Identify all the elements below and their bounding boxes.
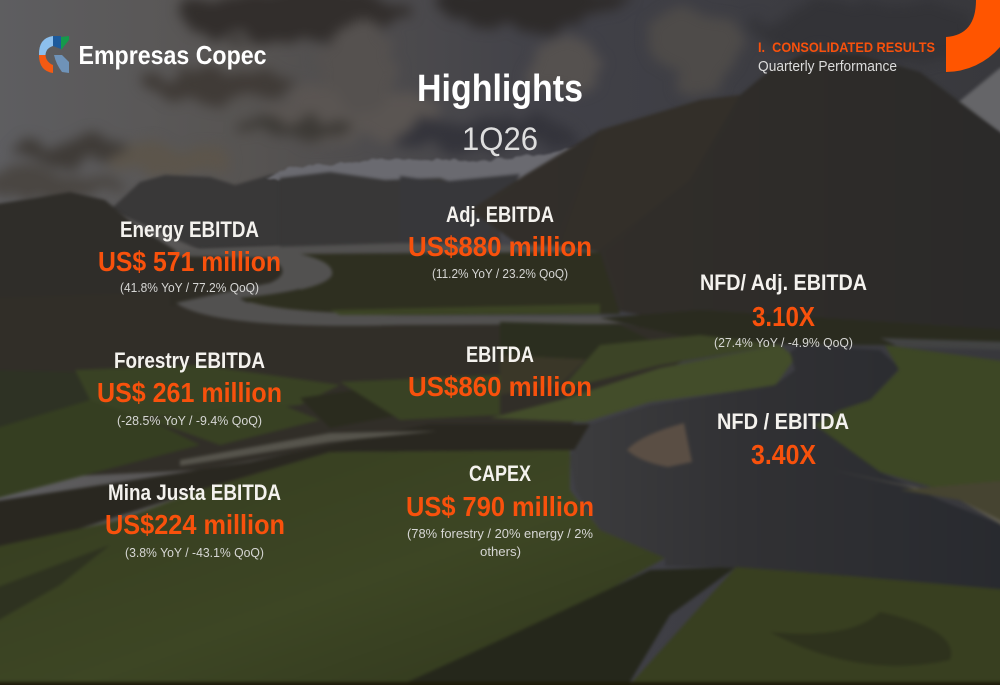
metric: NFD/ Adj. EBITDA: NFD/ Adj. EBITDA: [700, 270, 867, 295]
metric: Adj. EBITDA: US$880 million: [408, 231, 592, 262]
logo: Empresas Copec: Empresas Copec: [78, 40, 266, 70]
metric: Mina Justa EBITDA: US$224 million: [105, 509, 285, 540]
metric: NFD / EBITDA: [717, 409, 849, 470]
sand island: [627, 423, 692, 467]
river: [570, 345, 1000, 590]
valley forest: [0, 292, 720, 480]
metric: CAPEX: (78% forestry / 20% energy / 2%: [407, 526, 593, 541]
metric: NFD/ Adj. EBITDA: 3.10X: [752, 301, 815, 332]
left hill: [0, 192, 232, 305]
island: [242, 252, 620, 315]
big right mountain: [470, 52, 1000, 350]
section label: Quarterly Performance: [758, 58, 897, 75]
metric: CAPEX: CAPEX: [469, 461, 531, 486]
section label: [758, 39, 935, 75]
centre field: [490, 345, 795, 422]
far lake: [175, 243, 700, 326]
metric: NFD/ Adj. EBITDA: (27.4% YoY / -4.9% QoQ): [714, 335, 853, 350]
metric: Forestry EBITDA: (-28.5% YoY / -9.4% QoQ): [117, 413, 262, 428]
icon: logo mark: [39, 36, 69, 73]
metric: CAPEX: US$ 790 million: [406, 491, 594, 522]
metric: CAPEX: others): [480, 544, 521, 559]
metric: CAPEX: [406, 461, 594, 559]
metric: Adj. EBITDA: Adj. EBITDA: [446, 202, 554, 227]
metric: EBITDA: [408, 342, 592, 402]
sand spit: [832, 470, 1000, 530]
metric: NFD/ Adj. EBITDA: [700, 270, 867, 350]
metric: EBITDA: EBITDA: [466, 342, 534, 367]
metric: Forestry EBITDA: Forestry EBITDA: [114, 348, 265, 373]
dark band: [390, 567, 736, 685]
metric: NFD / EBITDA: 3.40X: [751, 439, 816, 470]
section label: I. CONSOLIDATED RESULTS: [758, 39, 935, 55]
main field: [0, 450, 665, 685]
metric: NFD / EBITDA: NFD / EBITDA: [717, 409, 849, 434]
dark tree band: [0, 424, 590, 548]
back range: [110, 172, 420, 250]
bottom right field: [625, 567, 1000, 685]
title: Highlights: [417, 68, 583, 110]
metric: Energy EBITDA: [98, 217, 281, 295]
metric: Energy EBITDA: (41.8% YoY / 77.2% QoQ): [120, 280, 259, 295]
title: [417, 68, 583, 157]
metric: Forestry EBITDA: US$ 261 million: [97, 377, 282, 408]
metric: Mina Justa EBITDA: (3.8% YoY / -43.1% QoQ): [125, 545, 264, 560]
right field: [815, 345, 1000, 495]
far snow peak right: [955, 68, 1000, 140]
metric: Adj. EBITDA: (11.2% YoY / 23.2% QoQ): [432, 266, 568, 281]
far band right: [600, 310, 1000, 345]
metric: Forestry EBITDA: [97, 348, 282, 428]
side channel: [180, 431, 437, 466]
metric: EBITDA: US$860 million: [408, 371, 592, 402]
logo: Empresas Copec: [39, 36, 266, 73]
land left of bend: [170, 250, 300, 306]
metric: Energy EBITDA: Energy EBITDA: [120, 217, 259, 242]
metric: Adj. EBITDA: [408, 202, 592, 281]
title: 1Q26: [462, 121, 538, 157]
metric: Energy EBITDA: US$ 571 million: [98, 246, 281, 277]
bottom edge: [0, 682, 1000, 685]
metric: Mina Justa EBITDA: Mina Justa EBITDA: [108, 480, 281, 505]
left fields: [0, 370, 100, 435]
corner arc: [946, 0, 1000, 72]
metric: Mina Justa EBITDA: [105, 480, 285, 560]
